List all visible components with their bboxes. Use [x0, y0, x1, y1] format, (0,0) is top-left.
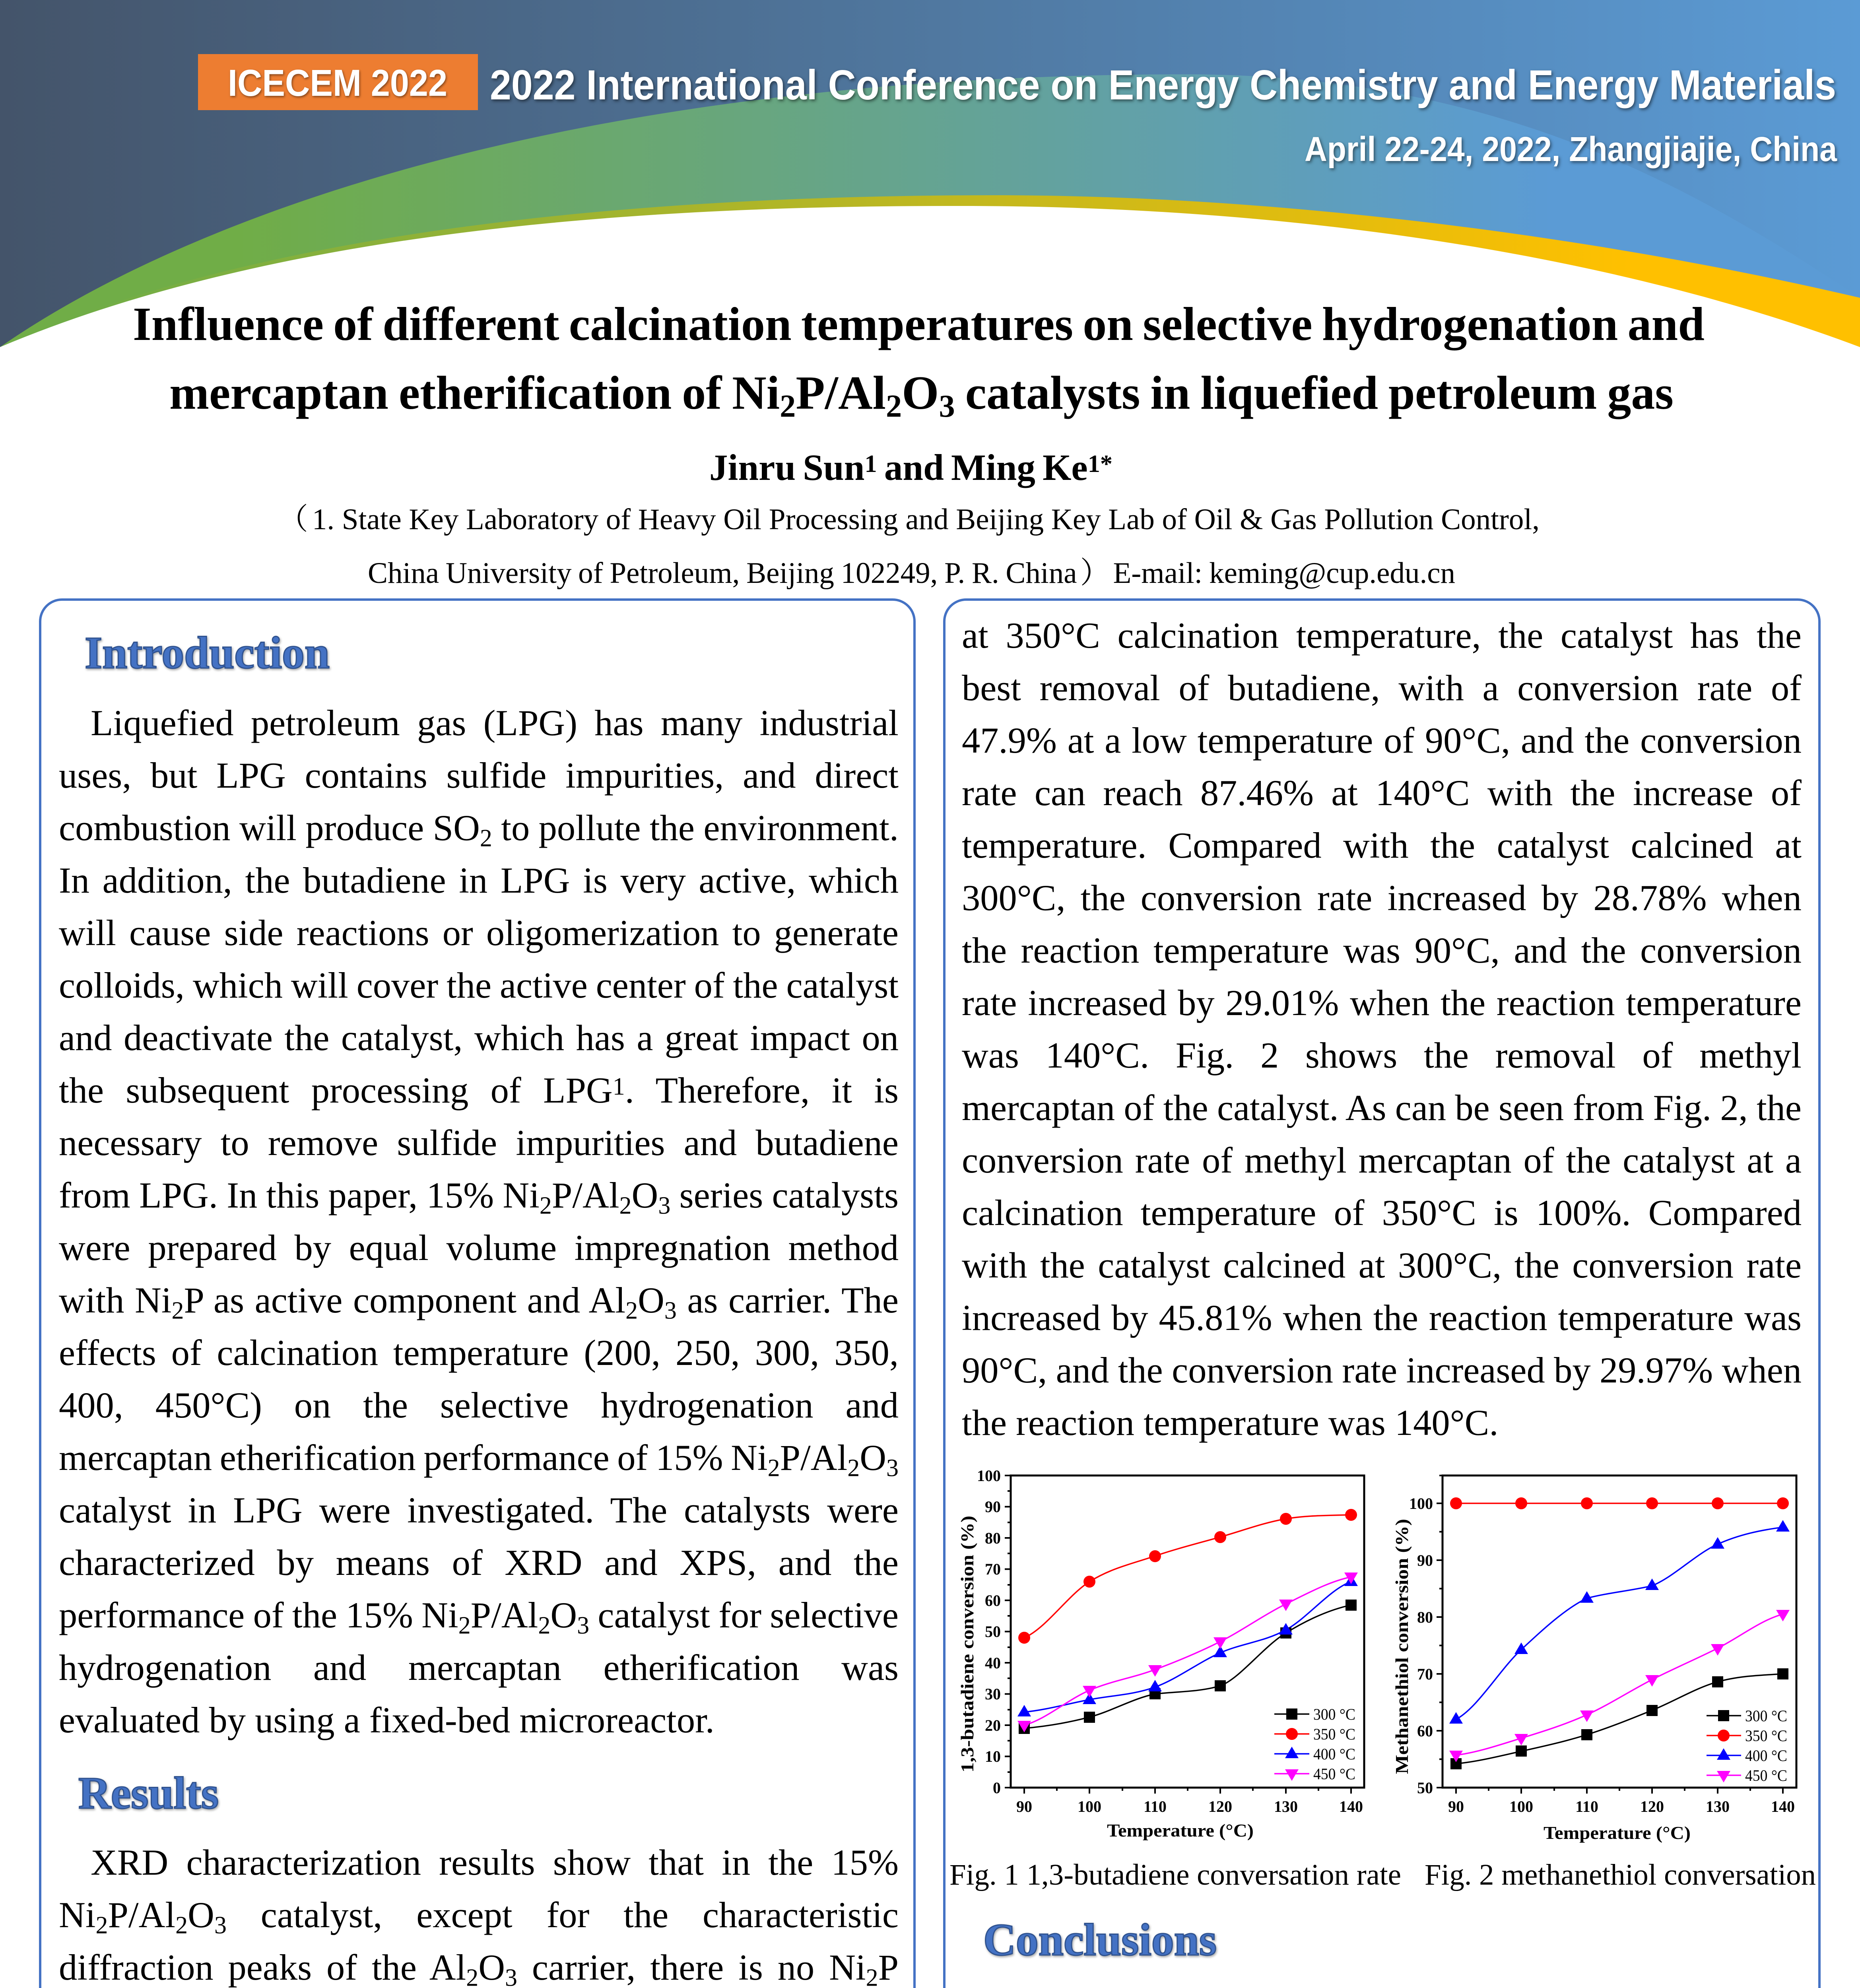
y axis labels: 70: [1417, 1665, 1433, 1683]
y axis labels: 80: [1417, 1608, 1433, 1626]
text block: results: [59, 1837, 899, 1988]
affiliation: （1. State Key Laboratory of Heavy Oil Processing and Beijing Key Lab of Oil & Gas Pollution Control,: [278, 503, 1540, 536]
header banner: [0, 0, 1860, 350]
title: [133, 296, 1705, 421]
text block: results continued: [962, 610, 1802, 1449]
y axis labels: 100: [977, 1467, 1001, 1485]
panel: right column: [943, 598, 1821, 1988]
x axis labels: 140: [1771, 1798, 1795, 1815]
title: Influence of different calcination temperatures on selective hydrogenation and: [133, 297, 1705, 350]
legend: 350 °C: [1745, 1727, 1787, 1745]
text block: introduction: were prepared by equal volume impregnation method: [59, 1228, 899, 1268]
x axis labels: 100: [1509, 1798, 1533, 1815]
text block: results continued: best removal of butadiene, with a conversion rate of: [962, 668, 1802, 709]
y axis title: 1,3-butadiene conversion (%): [957, 1516, 977, 1773]
text block: results continued: calcination temperature of 350°C is 100%. Compared: [962, 1193, 1802, 1233]
affiliation: [278, 498, 1540, 595]
text block: results continued: with the catalyst calcined at 300°C, the conversion rate: [962, 1245, 1802, 1286]
x axis labels: 130: [1706, 1798, 1730, 1815]
chart: 1,3-butadiene conversion: [954, 1463, 1376, 1845]
text block: introduction: will cause side reactions or oligomerization to generate: [59, 913, 899, 953]
text block: results continued: 47.9% at a low temperature of 90°C, and the conversion: [962, 720, 1802, 761]
legend: 450 °C: [1745, 1767, 1787, 1784]
x axis labels: 120: [1208, 1798, 1232, 1815]
caption: figure 1: Fig. 1 1,3-butadiene conversation rate: [949, 1858, 1401, 1891]
authors: Jinru Sun1 and Ming Ke1*: [709, 447, 1113, 488]
y axis labels: 10: [985, 1747, 1001, 1765]
text block: results continued: the reaction temperature was 140°C.: [962, 1403, 1498, 1443]
text block: introduction: with Ni2P as active component and Al2O3 as carrier. The: [59, 1280, 899, 1324]
data lines: [1456, 1503, 1783, 1764]
y axis labels: 30: [985, 1685, 1001, 1703]
text block: results continued: increased by 45.81% when the reaction temperature was: [962, 1298, 1802, 1338]
x axis title: Temperature (°C): [1544, 1823, 1691, 1843]
x axis title: Temperature (°C): [1107, 1820, 1254, 1840]
text block: introduction: colloids, which will cover the active center of the catalyst: [59, 965, 899, 1006]
y axis labels: [1409, 1495, 1433, 1797]
text block: results continued: was 140°C. Fig. 2 shows the removal of methyl: [962, 1035, 1802, 1076]
text block: introduction: the subsequent processing of LPG1. Therefore, it is: [59, 1070, 899, 1111]
text block: introduction: Liquefied petroleum gas (LPG) has many industrial: [91, 703, 899, 744]
text block: introduction: hydrogenation and mercaptan etherification was: [59, 1648, 899, 1688]
legend: [1274, 1705, 1355, 1783]
heading: Results: Results: [78, 1768, 219, 1818]
y axis labels: 70: [985, 1560, 1001, 1578]
x axis labels: 140: [1339, 1798, 1363, 1815]
text block: results continued: mercaptan of the catalyst. As can be seen from Fig. 2, the: [962, 1088, 1802, 1128]
legend: 300 °C: [1745, 1707, 1787, 1725]
text block: introduction: 400, 450°C) on the selective hydrogenation and: [59, 1385, 899, 1426]
text block: introduction: [59, 697, 899, 1747]
text block: introduction: from LPG. In this paper, 15% Ni2P/Al2O3 series catalysts: [59, 1175, 899, 1219]
panel: left column: [39, 598, 916, 1988]
text block: introduction: uses, but LPG contains sulfide impurities, and direct: [59, 755, 899, 796]
x axis labels: 120: [1640, 1798, 1664, 1815]
text block: results continued: at 350°C calcination temperature, the catalyst has the: [962, 615, 1802, 656]
text block: introduction: effects of calcination temperature (200, 250, 300, 350,: [59, 1333, 899, 1373]
text block: introduction: catalyst in LPG were investigated. The catalysts were: [59, 1490, 899, 1531]
y axis title: Methanethiol conversion (%): [1392, 1519, 1412, 1774]
x axis labels: [1016, 1798, 1363, 1815]
text block: introduction: necessary to remove sulfide impurities and butadiene: [59, 1123, 899, 1163]
heading: Introduction: Introduction: [85, 627, 330, 678]
text block: results: Ni2P/Al2O3 catalyst, except for the characteristic: [59, 1895, 899, 1939]
data markers: [1017, 1509, 1358, 1734]
y axis labels: 60: [1417, 1722, 1433, 1740]
y axis labels: 20: [985, 1716, 1001, 1734]
legend: 450 °C: [1313, 1765, 1355, 1783]
chart: methanethiol conversion: [1388, 1463, 1805, 1845]
y axis labels: 90: [985, 1498, 1001, 1516]
x axis labels: 90: [1016, 1798, 1032, 1815]
y axis labels: 0: [993, 1779, 1001, 1797]
text block: results: XRD characterization results show that in the 15%: [91, 1842, 899, 1883]
y axis labels: 40: [985, 1654, 1001, 1672]
x axis labels: [1448, 1798, 1795, 1815]
data markers: [1449, 1497, 1790, 1769]
text block: introduction: characterized by means of XRD and XPS, and the: [59, 1543, 899, 1583]
heading: Conclusions: Conclusions: [983, 1914, 1217, 1965]
legend: [1707, 1707, 1787, 1784]
text block: introduction: combustion will produce SO2 to pollute the environment.: [59, 808, 899, 852]
y axis labels: 50: [1417, 1779, 1433, 1797]
y axis labels: 80: [985, 1529, 1001, 1547]
text block: introduction: In addition, the butadiene in LPG is very active, which: [59, 860, 899, 901]
text block: introduction: and deactivate the catalyst, which has a great impact on: [59, 1018, 899, 1058]
text block: results continued: conversion rate of methyl mercaptan of the catalyst at a: [962, 1140, 1802, 1181]
title: mercaptan etherification of Ni2P/Al2O3 catalysts in liquefied petroleum gas: [169, 366, 1674, 424]
x axis labels: 110: [1144, 1798, 1167, 1815]
x axis labels: 100: [1078, 1798, 1101, 1815]
x axis labels: 90: [1448, 1798, 1464, 1815]
y axis labels: 90: [1417, 1551, 1433, 1569]
conference badge: ICECEM 2022: [228, 62, 447, 104]
affiliation: China University of Petroleum, Beijing 102249, P. R. China）E-mail: keming@cup.edu.cn: [368, 557, 1455, 590]
y axis labels: 60: [985, 1592, 1001, 1609]
text block: results continued: 90°C, and the conversion rate increased by 29.97% when: [962, 1350, 1802, 1391]
y axis labels: 100: [1409, 1495, 1433, 1512]
text block: introduction: mercaptan etherification performance of 15% Ni2P/Al2O3: [59, 1438, 899, 1481]
y axis labels: [977, 1467, 1001, 1797]
legend: 300 °C: [1313, 1705, 1355, 1723]
text block: results continued: the reaction temperature was 90°C, and the conversion: [962, 930, 1802, 971]
caption: figure 2: Fig. 2 methanethiol conversation: [1425, 1858, 1816, 1891]
x axis labels: 110: [1575, 1798, 1598, 1815]
y axis labels: 50: [985, 1623, 1001, 1640]
x axis labels: 130: [1274, 1798, 1298, 1815]
conference badge: [198, 54, 478, 110]
legend: 400 °C: [1313, 1745, 1355, 1763]
legend: 400 °C: [1745, 1747, 1787, 1765]
text block: results continued: rate increased by 29.01% when the reaction temperature: [962, 983, 1802, 1023]
text block: results continued: rate can reach 87.46% at 140°C with the increase of: [962, 773, 1802, 813]
text block: results continued: temperature. Compared with the catalyst calcined at: [962, 825, 1802, 866]
data lines: [1024, 1515, 1351, 1728]
text block: introduction: performance of the 15% Ni2P/Al2O3 catalyst for selective: [59, 1595, 899, 1639]
text block: results continued: 300°C, the conversion rate increased by 28.78% when: [962, 878, 1802, 918]
text block: introduction: evaluated by using a fixed-bed microreactor.: [59, 1700, 714, 1741]
legend: 350 °C: [1313, 1725, 1355, 1743]
